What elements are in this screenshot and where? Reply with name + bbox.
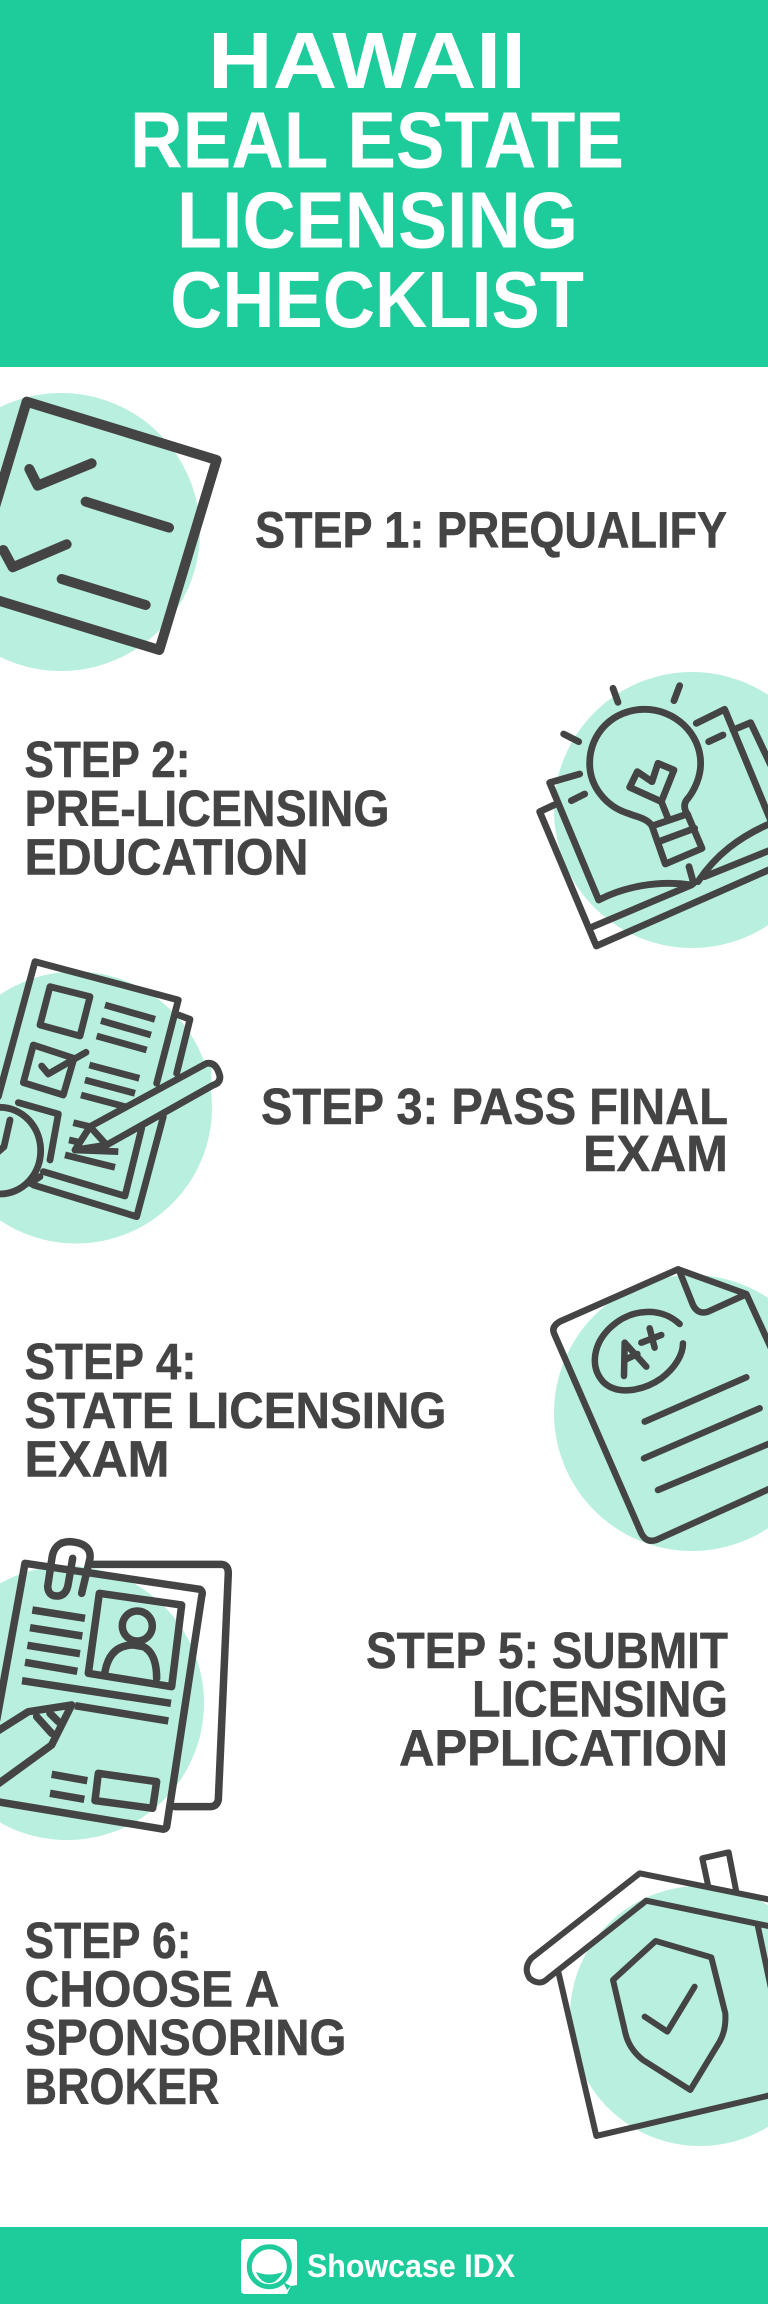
step 4 label: STATE LICENSING [24, 1382, 446, 1439]
step 6 label: SPONSORING [24, 2009, 346, 2066]
header banner with title [0, 0, 768, 367]
step 6 label [24, 1912, 346, 2115]
footer banner [0, 2227, 768, 2304]
step 5 label: STEP 5: SUBMIT [366, 1622, 728, 1679]
icon: checklist page (step 1) [0, 393, 217, 671]
step 4 label: STEP 4: [24, 1333, 196, 1390]
logo wordmark: Showcase IDX [307, 2248, 516, 2284]
step 5 label [366, 1622, 728, 1776]
icon: application form with photo (step 5) [0, 1542, 228, 1840]
icon: paperclip [48, 1542, 90, 1596]
step 2 label [24, 731, 390, 886]
title [130, 16, 624, 344]
icon: A+ graded paper (step 4) [553, 1269, 768, 1551]
icon: open book with light bulb (step 2) [540, 672, 768, 948]
icon: magnifier [0, 1107, 41, 1194]
step 6 label: CHOOSE A [24, 1960, 280, 2018]
step 2 label: PRE-LICENSING [24, 780, 390, 837]
step 2 label: STEP 2: [24, 731, 190, 788]
step 5 label: APPLICATION [399, 1720, 728, 1776]
step 2 label: EDUCATION [24, 828, 308, 886]
icon: pencil [0, 1705, 72, 1785]
step 6 label: STEP 6: [24, 1912, 192, 1969]
icon: pencil [75, 1063, 220, 1150]
icon: house with shield (step 6) [527, 1852, 768, 2146]
step 6 label: BROKER [24, 2058, 220, 2115]
step 4 label [24, 1333, 446, 1488]
step 5 label: LICENSING [472, 1670, 728, 1728]
title: HAWAII [208, 16, 526, 105]
icon: exam paper with pencil and magnifier (step 3) [0, 962, 220, 1244]
title: LICENSING [177, 176, 578, 264]
title: CHECKLIST [170, 255, 584, 344]
step 3 label [261, 1078, 728, 1182]
icon: Showcase IDX logo [241, 2239, 297, 2294]
step 4 label: EXAM [24, 1430, 170, 1488]
step 3 label: EXAM [583, 1125, 728, 1182]
icon: light bulb [564, 686, 702, 864]
step 3 label: STEP 3: PASS FINAL [261, 1078, 728, 1135]
title: REAL ESTATE [130, 96, 624, 184]
